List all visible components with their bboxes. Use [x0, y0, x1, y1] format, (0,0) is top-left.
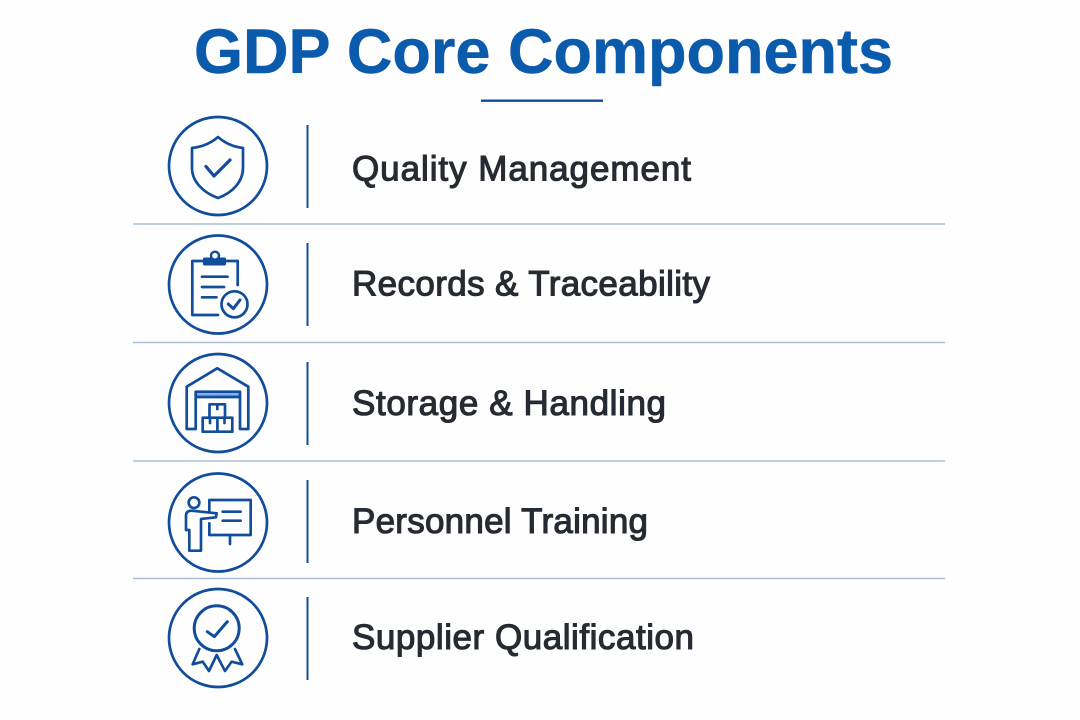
label: Records & Traceability: Records & Traceability — [352, 265, 710, 304]
label: Personnel Training: Personnel Training — [352, 502, 648, 541]
icon: shield with check — [169, 117, 267, 215]
row: Records & Traceability — [169, 236, 710, 334]
row: Quality Management — [169, 117, 691, 215]
row: Supplier Qualification — [169, 589, 694, 687]
icon: rosette with check — [169, 589, 267, 687]
label: Supplier Qualification: Supplier Qualification — [352, 618, 694, 657]
row: Personnel Training — [169, 474, 648, 572]
icon: trainer at presentation board — [169, 474, 267, 572]
label: Storage & Handling: Storage & Handling — [352, 384, 666, 423]
label: Quality Management: Quality Management — [352, 150, 691, 189]
icon: clipboard with check badge — [169, 236, 267, 334]
title underline — [481, 100, 603, 102]
row: Storage & Handling — [169, 354, 666, 452]
title: GDP Core Components — [194, 17, 893, 87]
icon: warehouse with boxes — [169, 354, 267, 452]
